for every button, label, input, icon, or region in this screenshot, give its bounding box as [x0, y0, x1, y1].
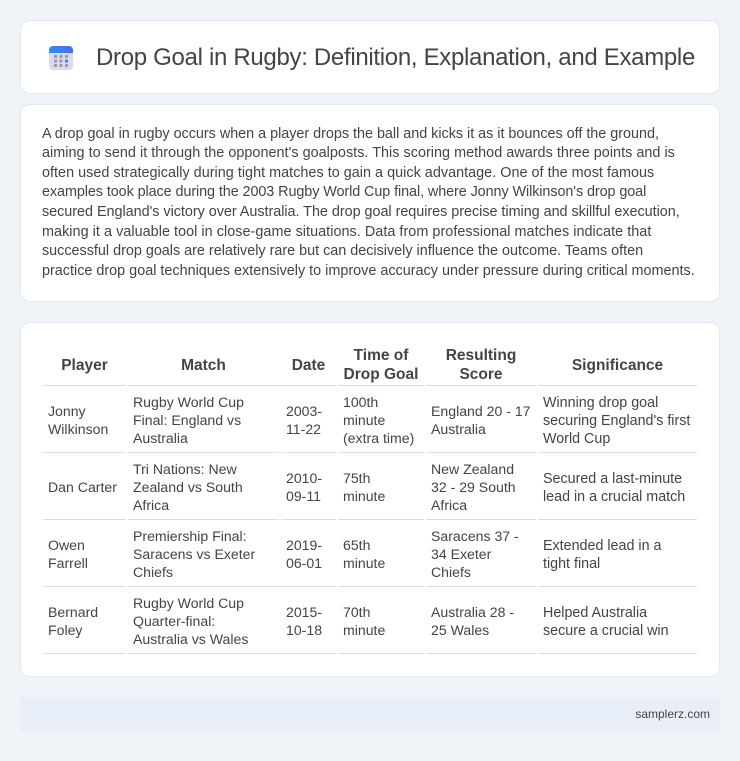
- panel: title card: [20, 20, 720, 94]
- table: notable drop goals: Australia vs Wales: [133, 631, 248, 647]
- table: notable drop goals: Winning drop goal: [543, 394, 658, 410]
- table: notable drop goals: Secured a last-minute: [543, 470, 682, 486]
- table: notable drop goals: 2019-: [286, 537, 322, 553]
- table: notable drop goals: 25 Wales: [431, 622, 489, 638]
- table: notable drop goals: Owen: [48, 537, 85, 553]
- table: notable drop goals: Rugby World Cup: [133, 595, 244, 611]
- panel: drop goals table card: [20, 322, 720, 677]
- table: notable drop goals: Resulting: [446, 347, 516, 364]
- panel: description paragraph: secured England's victory over Australia. The drop goal requires precise timing and skillful execution,: [42, 204, 680, 220]
- table: notable drop goals: [43, 347, 697, 654]
- table: notable drop goals: Foley: [48, 622, 82, 638]
- table: notable drop goals: Africa: [133, 497, 169, 513]
- table: notable drop goals: Zealand vs South: [133, 479, 243, 495]
- table: notable drop goals: secure a crucial win: [543, 622, 669, 638]
- panel: description paragraph: practice drop goal techniques extensively to improve accuracy under pressure during critical moments.: [42, 263, 695, 279]
- table: notable drop goals: Wilkinson: [48, 421, 108, 437]
- table: notable drop goals: 10-18: [286, 622, 322, 638]
- table: notable drop goals: tight final: [543, 556, 600, 572]
- table: notable drop goals: Saracens 37 -: [431, 528, 519, 544]
- table: notable drop goals: Tri Nations: New: [133, 461, 237, 477]
- table: notable drop goals: Helped Australia: [543, 604, 647, 620]
- panel: description paragraph: [20, 104, 720, 302]
- table: notable drop goals: Dan Carter: [48, 479, 117, 495]
- table: notable drop goals: minute: [343, 555, 385, 571]
- table: notable drop goals: Final: England vs: [133, 412, 241, 428]
- table: notable drop goals: 70th: [343, 604, 370, 620]
- table: notable drop goals: minute: [343, 412, 385, 428]
- table: notable drop goals: New Zealand: [431, 461, 514, 477]
- table: notable drop goals: 06-01: [286, 555, 322, 571]
- table: notable drop goals: 34 Exeter: [431, 546, 491, 562]
- table: notable drop goals: Australia: [133, 430, 188, 446]
- table: notable drop goals: Extended lead in a: [543, 538, 661, 554]
- table: notable drop goals: securing England's first: [543, 412, 690, 428]
- table: notable drop goals: Chiefs: [431, 564, 471, 580]
- table: notable drop goals: Date: [292, 356, 325, 374]
- title: Drop Goal in Rugby: Definition, Explanation, and Example: [96, 44, 695, 71]
- table: notable drop goals: Africa: [431, 497, 467, 513]
- table: notable drop goals: Score: [459, 366, 503, 383]
- table: notable drop goals: Premiership Final:: [133, 528, 247, 544]
- table: notable drop goals: Australia 28 -: [431, 604, 514, 620]
- table: notable drop goals: minute: [343, 622, 385, 638]
- table: notable drop goals: Bernard: [48, 604, 98, 620]
- table: notable drop goals: Farrell: [48, 555, 88, 571]
- table: notable drop goals: Significance: [572, 356, 663, 374]
- table: notable drop goals: 75th: [343, 470, 370, 486]
- table: notable drop goals: England 20 - 17: [431, 403, 531, 419]
- table: notable drop goals: Saracens vs Exeter: [133, 546, 255, 562]
- table: notable drop goals: Time of: [354, 347, 408, 364]
- table: notable drop goals: Quarter-final:: [133, 613, 215, 629]
- table: notable drop goals: 65th: [343, 537, 370, 553]
- panel: description paragraph: A drop goal in rugby occurs when a player drops the ball and kicks it as it bounces off the ground,: [42, 126, 659, 142]
- table: notable drop goals: 100th: [343, 394, 378, 410]
- table: notable drop goals: 2015-: [286, 604, 322, 620]
- panel: description paragraph: often used strategically during tight matches to gain a quick advantage. One of the most famous: [42, 165, 654, 181]
- table: notable drop goals: World Cup: [543, 430, 610, 446]
- table: notable drop goals: Rugby World Cup: [133, 394, 244, 410]
- panel: description paragraph: examples took place during the 2003 Rugby World Cup final, where Jonny Wilkinson's drop goal: [42, 184, 646, 200]
- table: notable drop goals: 11-22: [286, 421, 321, 437]
- table: notable drop goals: lead in a crucial match: [543, 488, 685, 504]
- footer source text: samplerz.com: [635, 707, 710, 721]
- table: notable drop goals: Chiefs: [133, 564, 173, 580]
- table: notable drop goals: Player: [61, 356, 108, 374]
- table: notable drop goals: Drop Goal: [344, 366, 418, 383]
- icon: calendar: [49, 46, 73, 70]
- table: notable drop goals: minute: [343, 488, 385, 504]
- table: notable drop goals: 2003-: [286, 403, 322, 419]
- panel: description paragraph: successful drop goals are relatively rare but can decisively influence the outcome. Teams often: [42, 243, 643, 259]
- table: notable drop goals: Match: [181, 356, 226, 374]
- footer bar: [20, 697, 720, 731]
- panel: description paragraph: making it a valuable tool in close-game situations. Data from professional matches indicate that: [42, 224, 651, 240]
- panel: description paragraph: aiming to send it through the opponent's goalposts. This scoring method awards three points and is: [42, 145, 675, 161]
- table: notable drop goals: (extra time): [343, 430, 414, 446]
- table: notable drop goals: 09-11: [286, 488, 321, 504]
- table: notable drop goals: 2010-: [286, 470, 322, 486]
- table: notable drop goals: Australia: [431, 421, 486, 437]
- table: notable drop goals: 32 - 29 South: [431, 479, 516, 495]
- table: notable drop goals: Jonny: [48, 403, 86, 419]
